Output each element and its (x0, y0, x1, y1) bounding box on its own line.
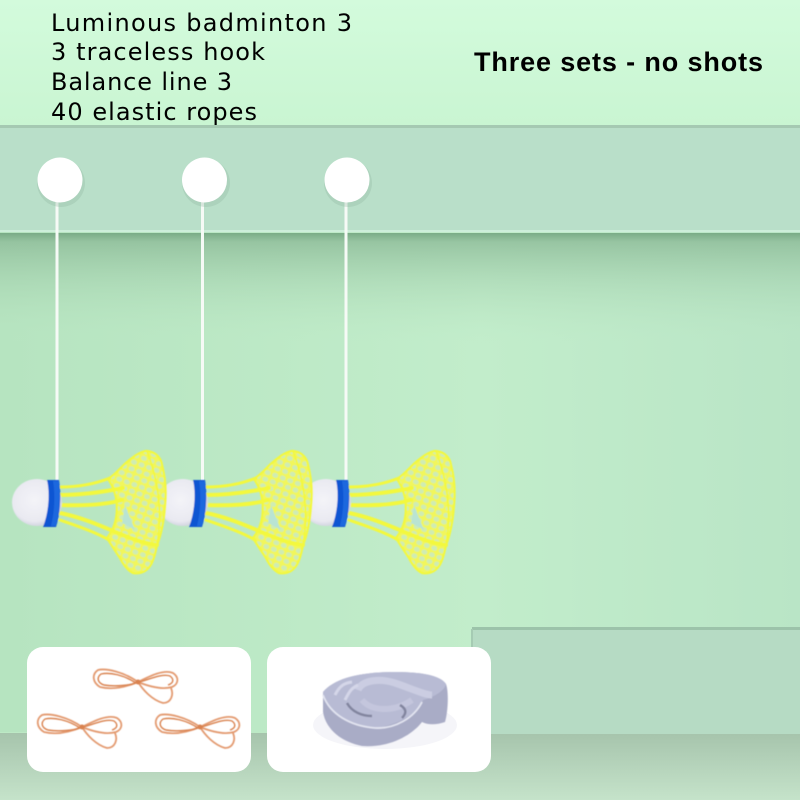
wall shadow under shelf (0, 233, 800, 343)
shuttlecock 3 (301, 451, 455, 573)
shuttlecock 1 (12, 451, 166, 573)
background: upper wall (0, 0, 800, 126)
icon: grey elastic band coil (323, 672, 448, 746)
panel: balance lines (27, 647, 251, 772)
hook 1 with string (37, 158, 85, 483)
background: main wall (0, 232, 800, 732)
floor (0, 733, 800, 800)
hook 3 with string (324, 158, 372, 483)
contents list: 40 elastic ropes (51, 98, 257, 126)
shuttlecock 2 (158, 451, 312, 573)
lower step (471, 627, 800, 734)
headline: Three sets - no shots (474, 47, 763, 77)
icon: orange line bundle left (38, 714, 121, 748)
upper shelf (0, 125, 800, 232)
icon: orange line bundle top (94, 670, 177, 703)
contents list: Luminous badminton 3 (51, 9, 352, 37)
contents list: 3 traceless hook (51, 38, 265, 66)
panel: elastic ropes (267, 647, 491, 772)
icon: orange line bundle right (156, 714, 239, 748)
contents list: Balance line 3 (51, 68, 232, 96)
hook 2 with string (182, 158, 230, 483)
contents list (51, 9, 352, 126)
